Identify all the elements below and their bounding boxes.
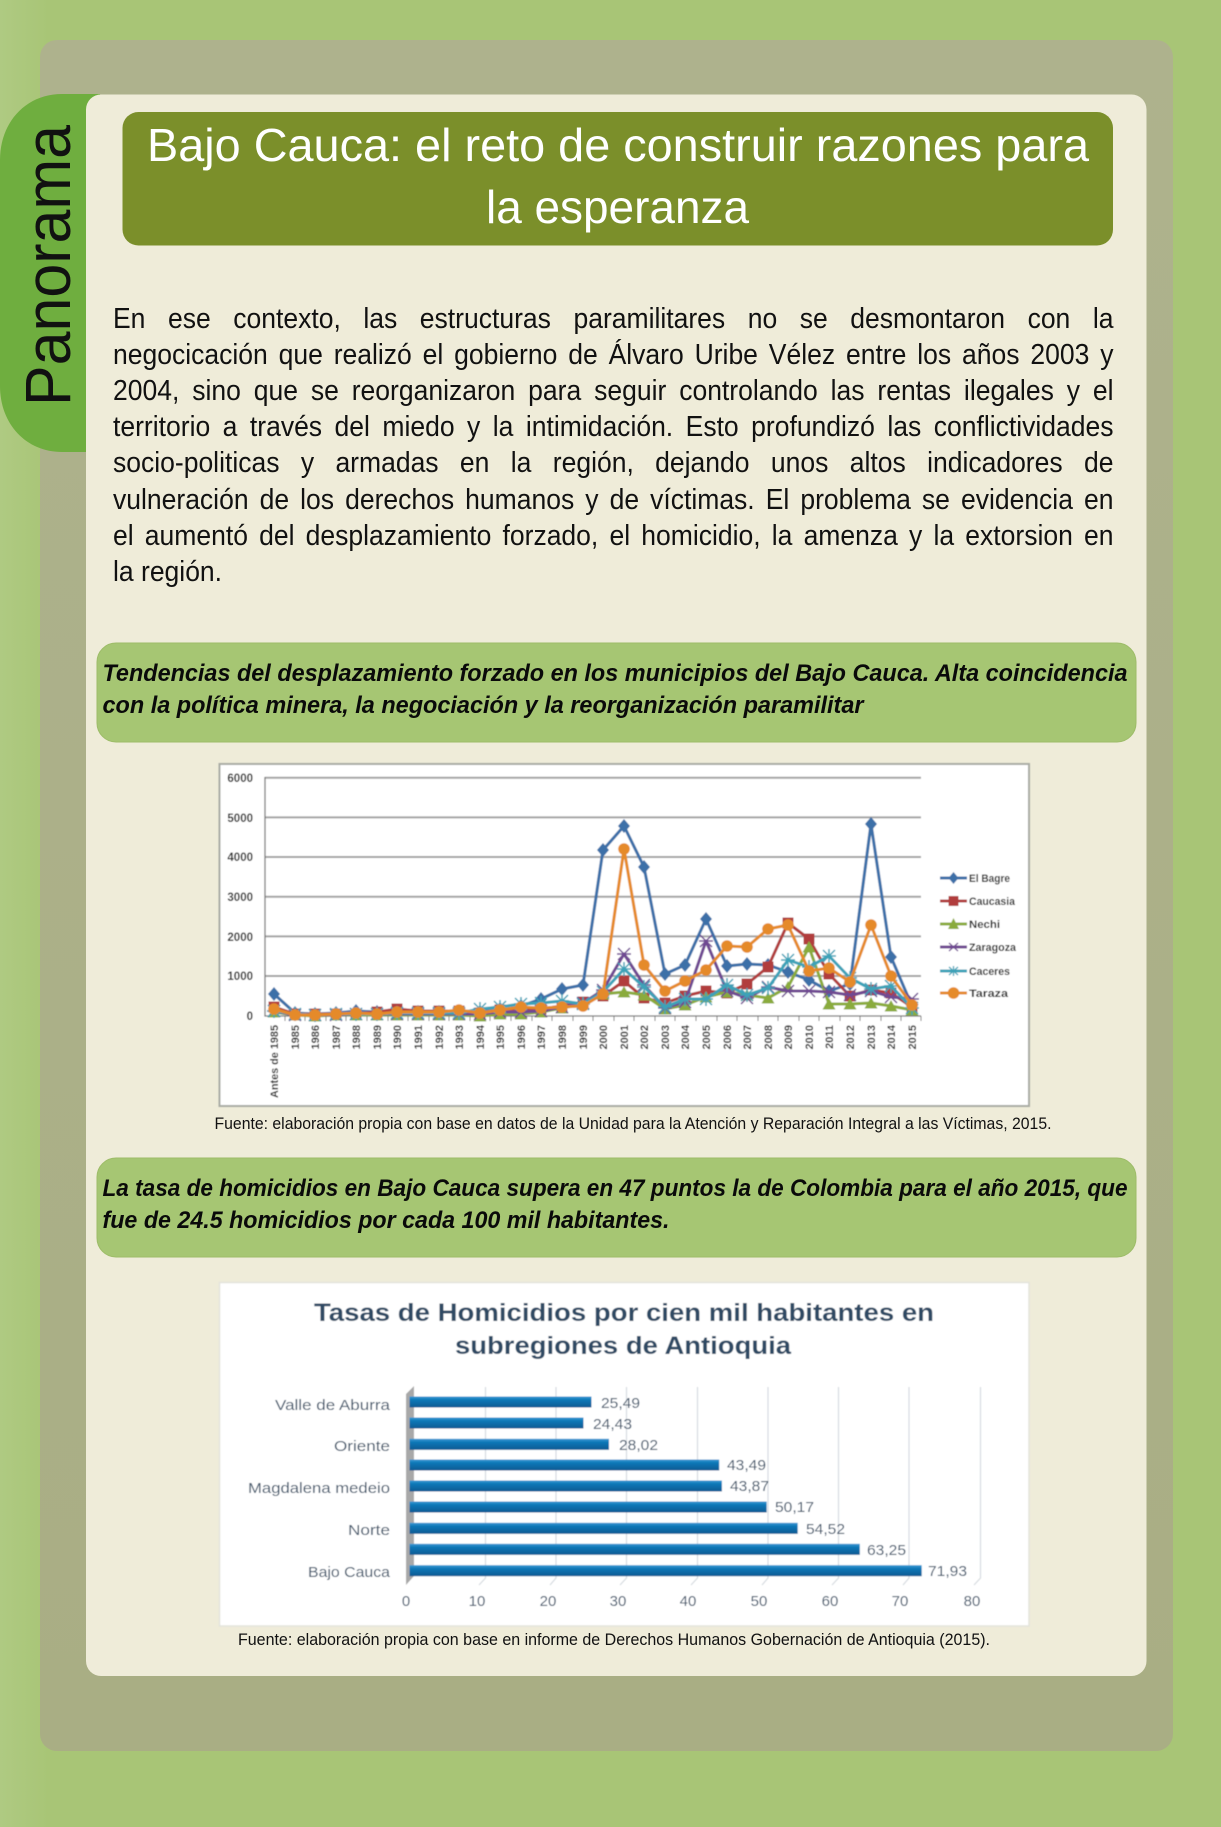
line chart: forced displacement by municipality: 1985 [290, 1025, 302, 1049]
body paragraph: 2004, sino que se reorganizaron para seguir controlando las rentas ilegales y el [113, 375, 1113, 407]
x axis labels: 70 [892, 1593, 908, 1610]
heading: homicide rate: La tasa de homicidios en Bajo Cauca supera en 47 puntos la de Colombia para el año 2015, que [102, 1175, 1128, 1202]
value labels: 43,49 [727, 1457, 766, 1474]
chart legend: Taraza [969, 988, 1009, 1000]
main cream panel [86, 94, 1146, 1676]
line chart: forced displacement by municipality: 2012 [845, 1025, 857, 1049]
line chart: forced displacement by municipality: 2015 [907, 1025, 919, 1049]
source note: bar chart: Fuente: elaboración propia con base en informe de Derechos Humanos Gobernación de Antioquia (2015). [238, 1631, 990, 1649]
line chart: forced displacement by municipality: 1987 [331, 1025, 343, 1049]
heading: homicide rate [97, 1158, 1136, 1257]
line chart: forced displacement by municipality: 1996 [516, 1025, 528, 1049]
line chart: forced displacement by municipality: 1997 [536, 1025, 548, 1049]
bar chart: homicide rates by subregion [220, 1282, 1029, 1626]
line chart: forced displacement by municipality: 4000 [227, 852, 253, 864]
line chart: forced displacement by municipality: 2001 [619, 1025, 631, 1049]
body paragraph: vulneración de los derechos humanos y de víctimas. El problema se evidencia en [113, 484, 1113, 516]
heading: displacement trends [97, 643, 1136, 742]
category labels: Bajo Cauca [308, 1564, 391, 1581]
category labels: Valle de Aburra [275, 1397, 391, 1414]
heading: homicide rate: fue de 24.5 homicidios por cada 100 mil habitantes. [102, 1207, 670, 1234]
line chart: forced displacement by municipality: 1999 [578, 1025, 590, 1049]
chart legend: Nechi [969, 919, 1000, 931]
value labels: 25,49 [601, 1395, 640, 1412]
line chart: forced displacement by municipality: 3000 [227, 892, 253, 904]
bars [410, 1396, 922, 1576]
x axis labels [402, 1593, 980, 1610]
line chart: forced displacement by municipality: 2006 [722, 1025, 734, 1049]
section tab: Panorama: Panorama [12, 125, 84, 406]
line chart: forced displacement by municipality: 1989 [372, 1025, 384, 1049]
line chart: forced displacement by municipality: 2005 [701, 1025, 713, 1049]
x axis labels: 0 [402, 1593, 410, 1610]
body paragraph: negocicación que realizó el gobierno de Álvaro Uribe Vélez entre los años 2003 y [113, 339, 1113, 371]
chart legend: Zaragoza [969, 942, 1017, 954]
line chart: forced displacement by municipality: 2014 [886, 1024, 898, 1049]
chart title: Tasas de Homicidios por cien mil habitantes en [314, 1299, 934, 1327]
category labels: Magdalena medeio [248, 1480, 390, 1497]
line chart: forced displacement by municipality: 1988 [351, 1025, 363, 1049]
section tab: Panorama [0, 94, 100, 452]
body paragraph: socio-politicas y armadas en la región, dejando unos altos indicadores de [113, 447, 1113, 479]
chart title: subregiones de Antioquia [455, 1332, 792, 1360]
line chart: forced displacement by municipality: 2010 [804, 1025, 816, 1049]
line chart: forced displacement by municipality: 2007 [742, 1025, 754, 1049]
chart legend: Caucasia [969, 896, 1016, 908]
line chart: forced displacement by municipality: 1992 [434, 1025, 446, 1049]
value labels: 63,25 [867, 1542, 906, 1559]
body paragraph: el aumentó del desplazamiento forzado, el homicidio, la amenza y la extorsion en [113, 520, 1113, 552]
x axis labels: 50 [751, 1593, 767, 1610]
category labels: Oriente [334, 1438, 390, 1455]
line chart: forced displacement by municipality: 2008 [763, 1025, 775, 1049]
line chart: forced displacement by municipality: 1995 [495, 1025, 507, 1049]
heading: displacement trends: con la política minera, la negociación y la reorganización paramilitar [102, 692, 865, 719]
heading: displacement trends: Tendencias del desplazamiento forzado en los municipios del Bajo Cauca. Alta coincidencia [102, 660, 1128, 687]
line chart: forced displacement by municipality: 2004 [680, 1024, 692, 1049]
line chart: forced displacement by municipality: 6000 [227, 773, 253, 785]
body paragraph [113, 303, 1114, 588]
value labels: 24,43 [593, 1416, 632, 1433]
x axis labels: 30 [610, 1593, 626, 1610]
title banner: Bajo Cauca: el reto de construir razones para [147, 119, 1089, 171]
line chart: forced displacement by municipality: 1998 [557, 1025, 569, 1049]
line chart: forced displacement by municipality: 1991 [413, 1025, 425, 1049]
line chart: forced displacement by municipality: 1993 [454, 1025, 466, 1049]
line chart: forced displacement by municipality: 1990 [392, 1025, 404, 1049]
x axis labels: 10 [469, 1593, 485, 1610]
line chart: forced displacement by municipality: 1000 [227, 971, 253, 983]
line chart: forced displacement by municipality: 2000 [227, 932, 253, 944]
line chart: forced displacement by municipality: 2000 [598, 1025, 610, 1049]
category labels: Norte [348, 1522, 390, 1539]
value labels: 28,02 [619, 1437, 658, 1454]
line chart: forced displacement by municipality: 0 [247, 1011, 253, 1023]
chart legend [940, 872, 1017, 1000]
chart title [314, 1299, 934, 1360]
line chart: forced displacement by municipality: 2011 [824, 1025, 836, 1049]
category labels [248, 1397, 391, 1581]
line chart: forced displacement by municipality [220, 764, 1029, 1106]
source note: line chart: Fuente: elaboración propia con base en datos de la Unidad para la Atención y Reparación Integral a las Víctimas, 2015. [214, 1115, 1052, 1133]
x axis labels: 80 [964, 1593, 980, 1610]
chart legend: El Bagre [969, 873, 1010, 885]
line chart: forced displacement by municipality: 1994 [475, 1024, 487, 1049]
line chart: forced displacement by municipality: 2003 [660, 1025, 672, 1049]
line chart: forced displacement by municipality: 2002 [639, 1025, 651, 1049]
line chart: forced displacement by municipality: 2009 [783, 1025, 795, 1049]
value labels: 54,52 [806, 1521, 845, 1538]
x axis labels: 60 [822, 1593, 838, 1610]
value labels [593, 1395, 967, 1580]
x axis labels: 20 [540, 1593, 556, 1610]
value labels: 71,93 [928, 1563, 967, 1580]
line chart: forced displacement by municipality: 1986 [310, 1025, 322, 1049]
body paragraph: territorio a través del miedo y la intimidación. Esto profundizó las conflictividades [113, 411, 1113, 443]
chart legend: Caceres [969, 966, 1010, 978]
body paragraph: En ese contexto, las estructuras paramilitares no se desmontaron con la [113, 303, 1113, 335]
title banner [122, 112, 1113, 246]
title banner: la esperanza [486, 181, 749, 233]
value labels: 50,17 [775, 1499, 814, 1516]
line chart: forced displacement by municipality: 2013 [866, 1025, 878, 1049]
body paragraph: la región. [113, 556, 222, 588]
line chart: forced displacement by municipality: Antes de 1985 [269, 1025, 281, 1098]
value labels: 43,87 [730, 1478, 769, 1495]
x axis labels: 40 [680, 1593, 696, 1610]
line chart: forced displacement by municipality: 5000 [227, 813, 253, 825]
